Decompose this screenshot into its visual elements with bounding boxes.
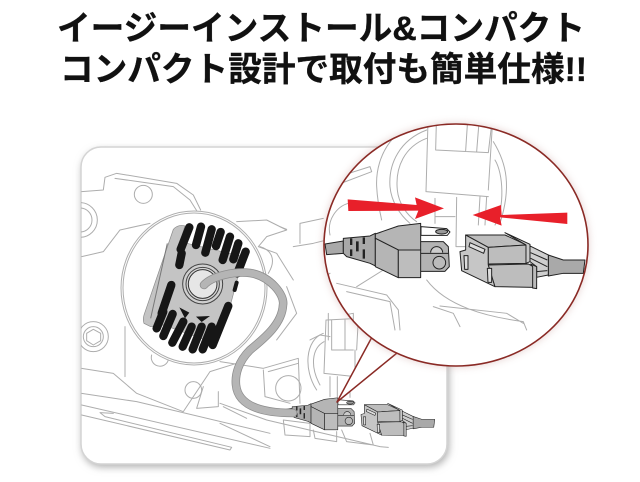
left connector [325, 223, 450, 278]
magnifier pointer [337, 337, 397, 402]
title: イージーインストール&コンパクト [57, 10, 585, 48]
background line art in circle [328, 125, 528, 330]
illustration panel [63, 147, 447, 464]
headlight line art [63, 173, 435, 450]
cable [204, 273, 293, 413]
red arrow: right-pointing [348, 197, 444, 219]
magnified detail circle [320, 110, 589, 367]
large circle around heatsink [121, 211, 267, 365]
red arrow: left-pointing [473, 205, 567, 226]
right connector [460, 233, 585, 289]
heatsink [143, 225, 246, 349]
small connector pair [281, 398, 435, 436]
panel shadow [82, 150, 449, 467]
infographic [58, 10, 592, 472]
title: コンパクト設計で取付も簡単仕様!! [60, 51, 587, 89]
title [57, 10, 587, 89]
